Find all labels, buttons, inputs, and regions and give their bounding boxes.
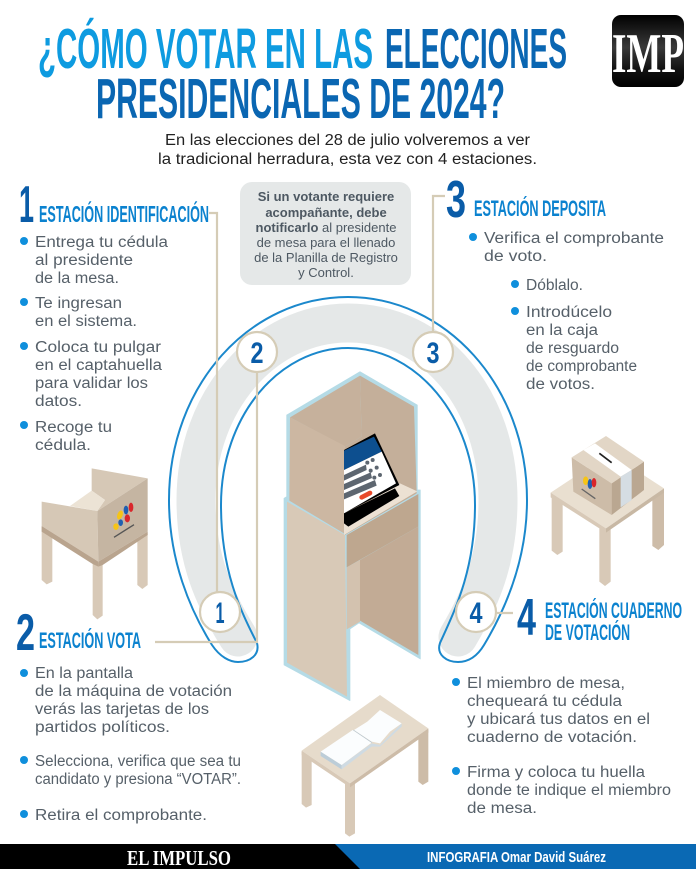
panel: estación 3 deposita: Verifica el comprobante: [484, 230, 664, 247]
panel: estación 1 identificación: de la mesa.: [35, 270, 119, 287]
panel: estación 2 vota: verás las tarjetas de los: [35, 701, 209, 718]
horseshoe diagram: 3: [426, 337, 440, 370]
panel: estación 2 vota: 2: [16, 604, 35, 662]
callout: acompañante: de la Planilla de Registro: [254, 250, 398, 265]
footer bar: EL IMPULSO: [127, 846, 231, 870]
footer bar: [0, 844, 696, 870]
callout: acompañante: acompañante, debe: [265, 205, 387, 220]
panel: estación 1 identificación: Recoge tu: [35, 419, 112, 436]
title: ¿CÓMO VOTAR EN LAS: [38, 17, 373, 81]
illustration: identification table: [42, 468, 148, 619]
panel: estación 1 identificación: 1: [19, 176, 34, 234]
panel: estación 4 cuaderno de votación: El miembro de mesa,: [467, 675, 625, 692]
footer bar: INFOGRAFIA Omar David Suárez: [427, 849, 606, 866]
panel: estación 3 deposita: 3: [446, 171, 466, 229]
panel: estación 3 deposita: de votos.: [526, 376, 595, 393]
panel: estación 1 identificación: Te ingresan: [35, 295, 122, 312]
panel: estación 4 cuaderno de votación: de mesa.: [467, 800, 537, 817]
horseshoe diagram: [155, 196, 527, 662]
panel: estación 4 cuaderno de votación: y ubicará tus datos en el: [467, 711, 650, 728]
horseshoe diagram: 1: [216, 597, 224, 630]
subtitle: [158, 132, 537, 168]
panel: estación 4 cuaderno de votación: donde te indique el miembro: [467, 782, 671, 799]
callout: acompañante: y Control.: [298, 265, 354, 280]
title: [38, 17, 567, 131]
horseshoe diagram: 4: [470, 597, 483, 630]
icon: CEC logo: [582, 476, 596, 499]
panel: estación 3 deposita: [446, 171, 664, 393]
panel: estación 1 identificación: datos.: [35, 393, 82, 410]
horseshoe diagram: 2: [250, 337, 264, 370]
panel: estación 4 cuaderno de votación: chequeará tu cédula: [467, 693, 622, 710]
notebook: [321, 710, 402, 769]
icon: CEC logo: [113, 503, 134, 537]
callout: acompañante: notificarlo al presidente: [256, 220, 396, 235]
illustration: notebook table: [302, 695, 428, 837]
panel: estación 4 cuaderno de votación: 4: [517, 589, 536, 647]
panel: estación 1 identificación: para validar los: [35, 375, 148, 392]
panel: estación 1 identificación: en el sistema.: [35, 313, 137, 330]
callout: acompañante: [240, 182, 411, 285]
panel: estación 2 vota: partidos políticos.: [35, 719, 170, 736]
panel: estación 3 deposita: de comprobante: [526, 358, 637, 375]
subtitle: la tradicional herradura, esta vez con 4 estaciones.: [158, 151, 537, 168]
panel: estación 2 vota: candidato y presiona “VOTAR”.: [35, 771, 241, 788]
panel: estación 1 identificación: en el captahuella: [35, 357, 162, 374]
panel: estación 2 vota: En la pantalla: [35, 665, 133, 682]
callout: acompañante: de mesa para el llenado: [257, 235, 395, 250]
panel: estación 2 vota: Retira el comprobante.: [35, 807, 207, 824]
panel: estación 4 cuaderno de votación: DE VOTACIÓN: [545, 620, 630, 645]
panel: estación 4 cuaderno de votación: [452, 589, 682, 817]
panel: estación 3 deposita: Dóblalo.: [526, 277, 583, 294]
panel: estación 2 vota: Selecciona, verifica que sea tu: [35, 753, 241, 770]
panel: estación 3 deposita: en la caja: [526, 322, 598, 339]
subtitle: En las elecciones del 28 de julio volveremos a ver: [165, 132, 530, 149]
panel: estación 3 deposita: de resguardo: [526, 340, 619, 357]
illustration: ballot box table: [551, 436, 664, 586]
panel: estación 3 deposita: de voto.: [484, 248, 547, 265]
panel: estación 1 identificación: Entrega tu cédula: [35, 234, 168, 251]
panel: estación 1 identificación: al presidente: [35, 252, 133, 269]
panel: estación 2 vota: [16, 604, 241, 824]
panel: estación 3 deposita: Introdúcelo: [526, 304, 612, 321]
callout: acompañante: Si un votante requiere: [258, 189, 394, 204]
panel: estación 1 identificación: Coloca tu pulgar: [35, 339, 161, 356]
panel: estación 4 cuaderno de votación: cuaderno de votación.: [467, 729, 637, 746]
voting booth with machine: [284, 372, 420, 701]
panel: estación 1 identificación: [19, 176, 209, 454]
panel: estación 1 identificación: ESTACIÓN IDENTIFICACIÓN: [39, 200, 209, 227]
panel: estación 2 vota: de la máquina de votación: [35, 683, 232, 700]
voting machine: [344, 433, 399, 527]
panel: estación 1 identificación: cédula.: [35, 437, 91, 454]
panel: estación 4 cuaderno de votación: Firma y coloca tu huella: [467, 764, 645, 781]
panel: estación 2 vota: ESTACIÓN VOTA: [39, 628, 141, 653]
